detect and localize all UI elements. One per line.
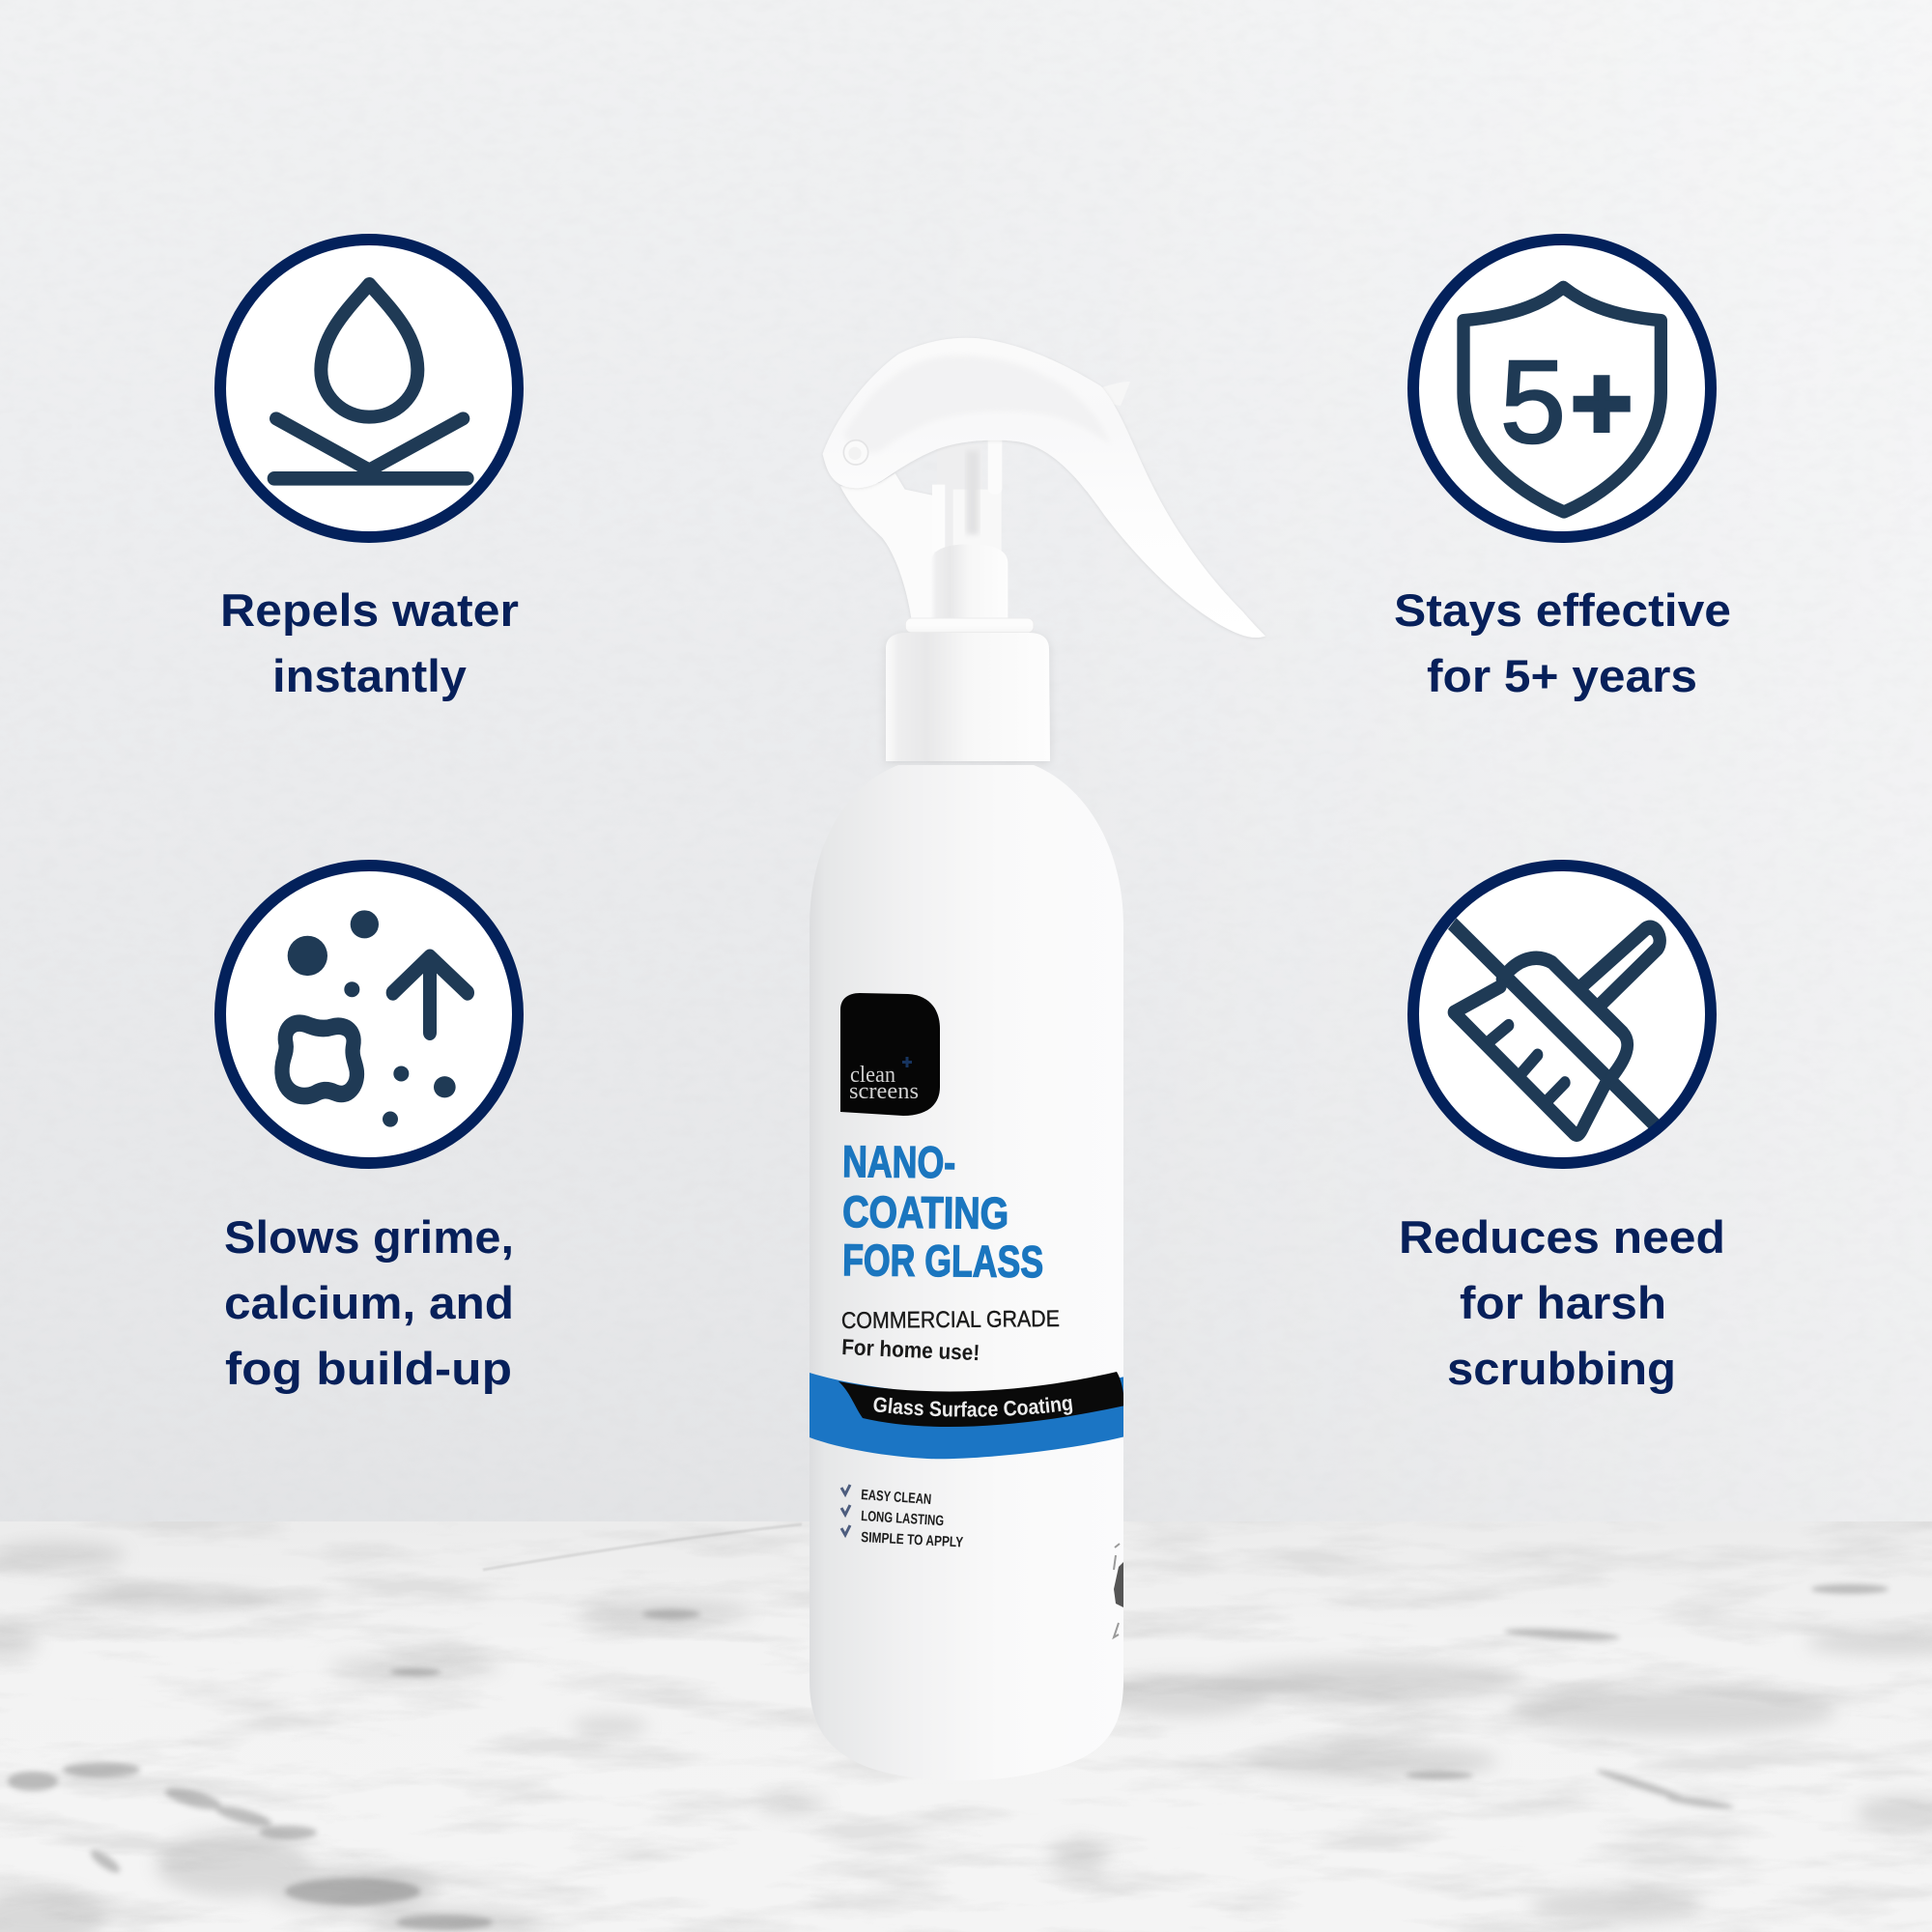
feature: slows grime [220,866,518,1394]
feature: repels water [220,240,519,701]
trigger sprayer [823,338,1265,638]
caption: scrubbing [1447,1343,1676,1394]
product title: COATING [842,1186,1009,1238]
icon: particles and up arrow [220,866,518,1163]
icon: shield with 5+: 5 [1500,336,1566,468]
product title: FOR GLASS [842,1235,1043,1287]
commercial grade text [842,1310,1059,1360]
background: marble floor [0,1521,1932,1932]
feature: stays effective [1394,240,1731,701]
caption [1399,1211,1725,1394]
icon: water drop on surface [220,240,518,537]
black band with product line [838,1372,1123,1427]
pump stem [930,428,1008,620]
benefits checklist [841,1485,964,1551]
feature: reduces scrubbing [1399,866,1725,1394]
caption [1394,584,1731,701]
caption: Repels water [220,584,519,636]
product: spray bottle [810,338,1265,1771]
caption [224,1211,514,1394]
commercial grade text: COMMERCIAL GRADE [841,1306,1060,1334]
bottle body [810,765,1123,1780]
product title [843,1146,1043,1279]
caption: Slows grime, [224,1211,514,1263]
benefits checklist: EASY CLEAN [861,1487,932,1508]
brand logo: clean [850,1063,895,1088]
label artwork [810,993,1123,1640]
caption: Reduces need [1399,1211,1725,1263]
caption: for harsh [1460,1277,1666,1328]
benefits checklist: LONG LASTING [861,1508,945,1529]
icon: crossed-out brush [1413,866,1711,1163]
caption: Stays effective [1394,584,1731,636]
brand logo: screens [849,1079,919,1104]
caption: instantly [272,650,467,701]
icon: shield with 5+: + [1571,344,1633,461]
side panel print fragment [1114,1544,1123,1637]
icon: shield with 5+ [1413,240,1711,537]
benefits checklist: SIMPLE TO APPLY [861,1529,964,1551]
blue band [810,1373,1125,1459]
black band with product line: Glass Surface Coating [873,1397,1072,1417]
background: wall [0,0,1932,1526]
brand logo [840,993,940,1116]
caption: fog build-up [225,1343,512,1394]
caption [220,584,519,701]
commercial grade text: For home use! [841,1334,980,1365]
bottle cap collar [886,633,1050,761]
caption: calcium, and [224,1277,514,1328]
product title: NANO- [842,1136,955,1187]
caption: for 5+ years [1427,650,1697,701]
